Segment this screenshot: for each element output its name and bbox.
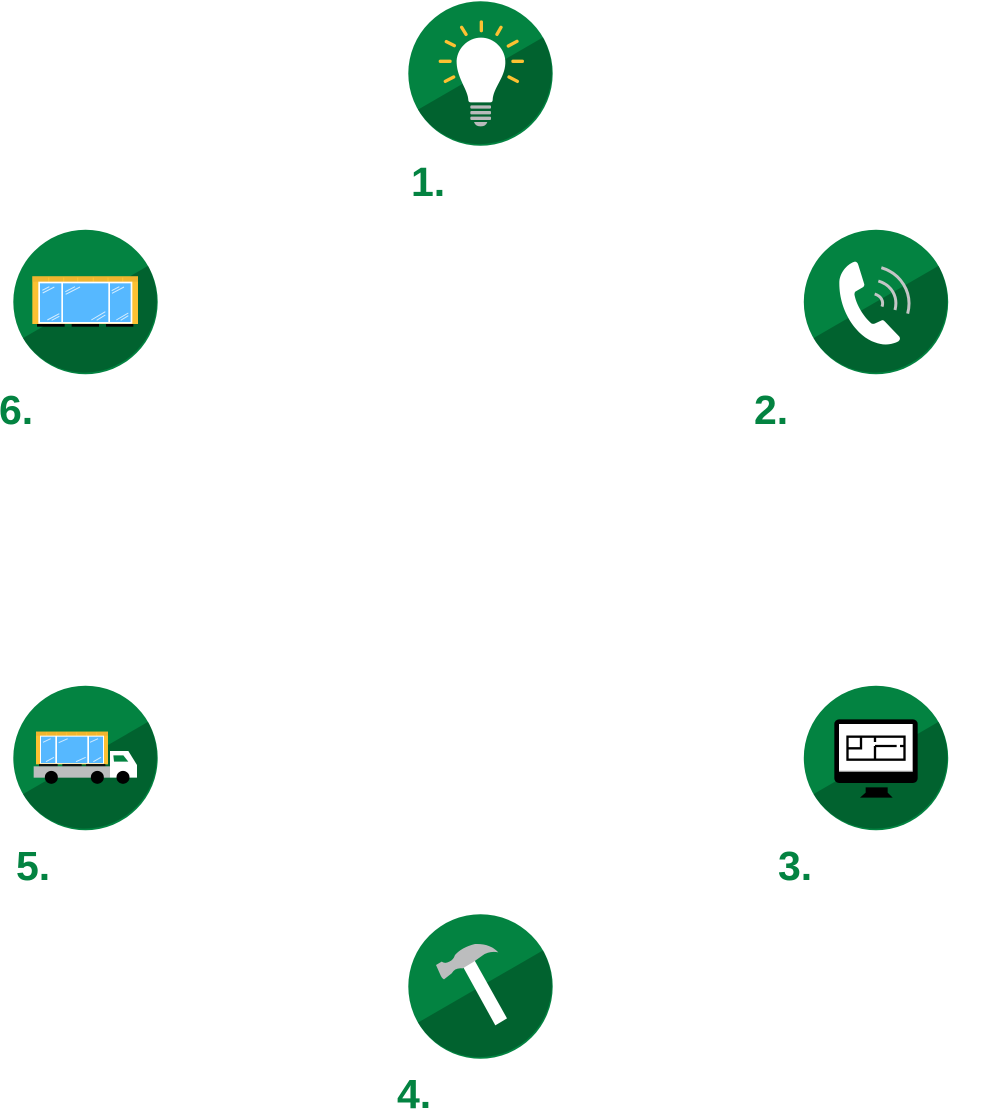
step 6: installed window xyxy=(0,230,158,433)
icon: framed window xyxy=(13,230,158,374)
step 5: delivery xyxy=(13,686,158,889)
number 6: 6. xyxy=(0,387,33,433)
number 5: 5. xyxy=(16,843,50,889)
icon: truck carrying window xyxy=(13,686,158,830)
number 2: 2. xyxy=(754,387,788,433)
step 4: build xyxy=(397,914,553,1109)
step 2: call xyxy=(754,230,948,433)
number 3: 3. xyxy=(778,843,812,889)
icon: light bulb xyxy=(408,1,553,146)
step 3: design xyxy=(778,686,948,889)
step 1: idea xyxy=(408,1,553,205)
icon: hammer xyxy=(408,914,553,1059)
icon: monitor with floor plan xyxy=(804,686,948,830)
icon: telephone xyxy=(804,230,948,374)
number 1: 1. xyxy=(411,159,445,205)
